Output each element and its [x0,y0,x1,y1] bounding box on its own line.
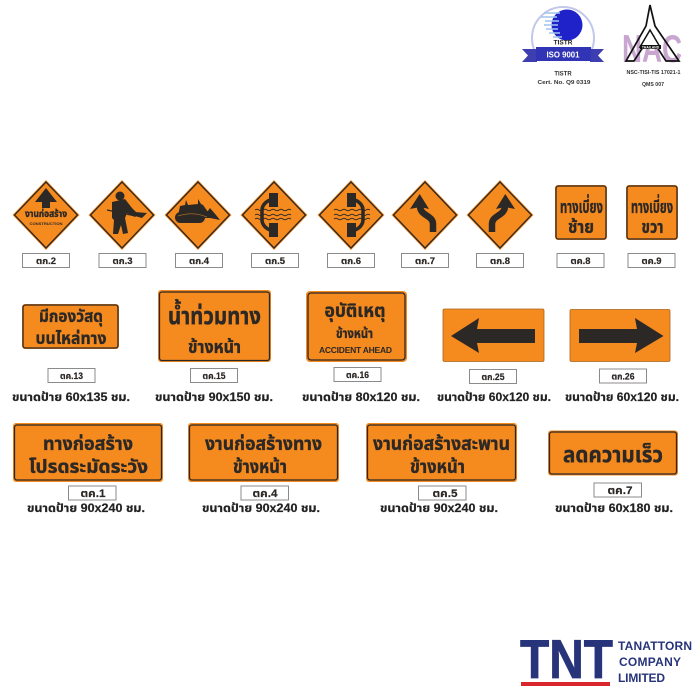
sign ตก.4: bulldozer diamond [164,180,232,250]
labels: top row sign codes [22,254,675,268]
labels: top row sign codes: ตค.8 [570,256,590,266]
labels and sizes: bottom row: ตค.1 [80,488,106,500]
sign ตค.5: bridge construction ahead: งานก่อสร้างสะพาน [373,433,510,455]
logo: NAC Thailand tower certification: THAILAND [642,45,660,49]
labels: top row sign codes: ตก.5 [265,256,285,266]
labels and sizes: middle row: ขนาดป้าย 90x150 ชม. [155,391,273,404]
sign ตค.16: accident ahead: อุบัติเหตุ [324,301,386,322]
labels and sizes: middle row: ขนาดป้าย 60x120 ชม. [437,391,551,404]
icon: up arrow [35,188,57,208]
logo: NAC Thailand tower certification: NSC-TISI-TIS 17021-1 [626,70,681,76]
sign ตก.6: bridge bypass right diamond [318,180,384,250]
sign ตค.15: flooded road ahead: น้ำท่วมทาง [168,299,261,330]
labels: top row sign codes: ตก.2 [36,256,56,266]
sign ตค.16: accident ahead: ACCIDENT AHEAD [319,345,392,355]
labels and sizes: middle row: ตค.13 [60,371,83,381]
labels and sizes: bottom row [27,483,673,515]
sign ตค.9: detour right: ขวา [642,217,664,237]
sign ตค.1: construction, please be careful: โปรดระมัดระวัง [29,457,148,478]
icon: bypass road with water [255,193,291,237]
labels and sizes: bottom row: ขนาดป้าย 90x240 ชม. [27,502,145,515]
sign ตค.4: road construction ahead: ข้างหน้า [233,456,287,478]
sign ตค.8: detour left [555,185,607,240]
labels: top row sign codes: ตก.8 [490,256,510,266]
labels: top row sign codes: ตก.6 [341,256,361,266]
sign ตค.15: flooded road ahead: ข้างหน้า [188,337,241,357]
sign ตค.5: bridge construction ahead: ข้างหน้า [410,456,465,478]
sign ตก.2: construction ahead diamond [12,180,80,250]
sign ตค.9: detour right: ทางเบี่ยง [631,194,673,217]
sign ตค.16: accident ahead [306,291,407,362]
labels and sizes: middle row: ตก.26 [612,372,634,382]
labels: top row sign codes: ตก.3 [112,256,132,266]
sign ตค.13: materials on shoulder: มีกองวัสดุ [39,307,103,327]
logo: TNT Tanattorn Company Limited [520,628,692,690]
labels and sizes: bottom row: ตค.5 [432,488,458,500]
icon: right arrow [579,318,664,353]
logo: TISTR ISO 9001 certification: TISTR [554,40,573,46]
sign ตค.8: detour left: ช้าย [568,217,594,237]
sign ตก.2: construction ahead diamond: CONSTRUCTION [30,221,63,226]
sign ตค.13: materials on shoulder: บนไหล่ทาง [36,328,106,348]
labels and sizes: middle row [12,368,679,404]
icon: left arrow [451,318,535,353]
labels and sizes: bottom row: ขนาดป้าย 60x180 ชม. [555,502,673,515]
labels and sizes: middle row: ตค.16 [346,370,369,380]
logo: TNT Tanattorn Company Limited: TANATTORN [618,639,692,653]
sign ตก.3: worker with shovel diamond [88,180,156,250]
labels: top row sign codes: ตค.9 [642,256,662,266]
icon: bulldozer [175,199,220,223]
labels and sizes: bottom row: ตค.7 [608,485,632,497]
sign ตก.5: bridge bypass left diamond [240,180,308,250]
sign ตก.7: curve left arrow diamond [392,180,458,250]
sign ตค.4: road construction ahead: งานก่อสร้างทาง [205,433,322,455]
sign ตค.5: bridge construction ahead [366,423,517,482]
labels and sizes: middle row: ตก.25 [482,372,504,382]
sign ตค.1: construction, please be careful: ทางก่อสร้าง [43,433,133,455]
labels and sizes: middle row: ตค.15 [202,371,226,381]
logo: TNT Tanattorn Company Limited: TNT [520,628,613,690]
logo: TISTR ISO 9001 certification: ISO 9001 [546,50,580,60]
icon: worker [107,192,147,234]
icon: bypass road with water [334,193,370,237]
labels and sizes: middle row: ขนาดป้าย 80x120 ชม. [302,391,420,404]
sign ตค.9: detour right [626,185,678,240]
labels and sizes: middle row: ขนาดป้าย 60x135 ชม. [12,391,130,404]
labels and sizes: bottom row: ตค.4 [252,488,278,500]
sign ตค.15: flooded road ahead [158,290,271,362]
labels: top row sign codes: ตก.7 [415,256,435,266]
sign ตก.26: right arrow [570,310,670,362]
labels and sizes: bottom row: ขนาดป้าย 90x240 ชม. [380,502,498,515]
sign ตค.7: reduce speed: ลดความเร็ว [563,442,663,467]
sign ตก.2: construction ahead diamond: งานก่อสร้าง [25,208,68,220]
logo: TISTR ISO 9001 certification: Cert. No. Q9 0319 [538,80,590,86]
sign ตก.8: curve right arrow diamond [466,180,534,250]
logo: TNT Tanattorn Company Limited: COMPANY [619,655,681,669]
icon: winding arrow [410,194,433,232]
sign ตก.25: left arrow [443,309,544,362]
logo: NAC Thailand tower certification: QMS 007 [642,82,664,88]
labels: top row sign codes: ตก.4 [189,256,209,266]
icon: winding arrow [492,194,515,232]
logo: NAC Thailand tower certification [622,5,682,88]
sign ตค.13: materials on shoulder [22,304,119,349]
labels and sizes: middle row: ขนาดป้าย 60x120 ชม. [565,391,679,404]
sign ตค.7: reduce speed [548,430,678,476]
logo: TISTR ISO 9001 certification [522,7,604,86]
logo: TNT Tanattorn Company Limited: LIMITED [618,671,665,685]
sign ตค.8: detour left: ทางเบี่ยง [560,194,603,217]
sign ตค.1: construction, please be careful [13,423,163,482]
logo: TISTR ISO 9001 certification: TISTR [554,72,572,78]
sign ตค.16: accident ahead: ข้างหน้า [336,326,373,341]
sign ตค.4: road construction ahead [188,423,339,482]
labels and sizes: bottom row: ขนาดป้าย 90x240 ชม. [202,502,320,515]
